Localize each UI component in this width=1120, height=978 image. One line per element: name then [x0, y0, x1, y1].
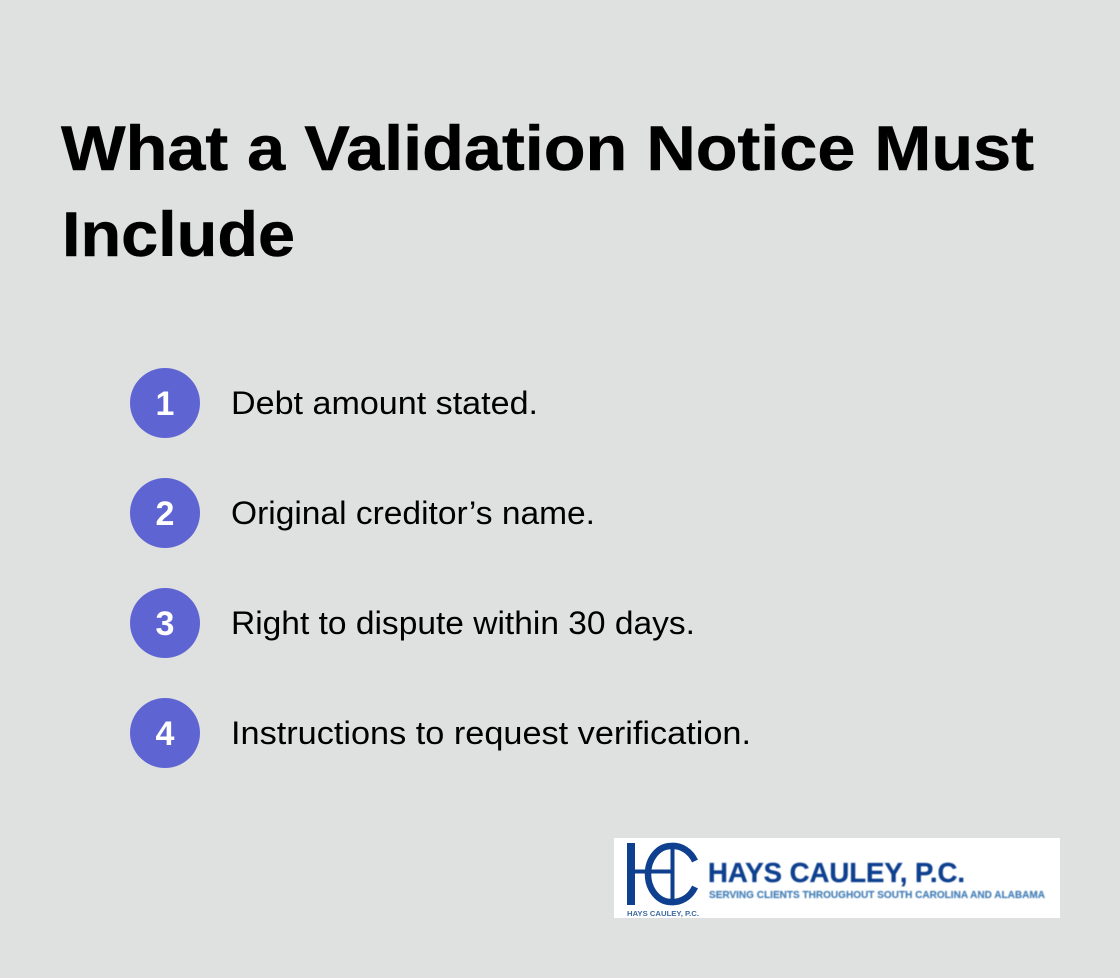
list item 4: 4 [156, 715, 175, 753]
logo [614, 838, 1060, 918]
list item 3: 3 [156, 605, 174, 643]
list item 2: Original creditor’s name. [231, 495, 595, 531]
list item 4: Instructions to request verification. [231, 715, 751, 751]
title: What a Validation Notice Must [61, 114, 1034, 184]
list item 3: Right to dispute within 30 days. [231, 605, 695, 641]
list item 1: 1 [156, 385, 174, 423]
list item 3 [130, 588, 695, 658]
title [61, 114, 1034, 270]
logo small caption: HAYS CAULEY, P.C. [627, 911, 699, 918]
numbered list [130, 368, 751, 768]
logo name: HAYS CAULEY, P.C. [708, 857, 965, 888]
list item 2 [130, 478, 595, 548]
title: Include [62, 200, 295, 270]
logo tagline: SERVING CLIENTS THROUGHOUT SOUTH CAROLINA AND ALABAMA [709, 890, 1045, 901]
list item 1 [130, 368, 538, 438]
list item 1: Debt amount stated. [231, 385, 538, 421]
list item 4 [130, 698, 751, 768]
icon: HC monogram [627, 843, 695, 905]
list item 2: 2 [156, 495, 174, 533]
